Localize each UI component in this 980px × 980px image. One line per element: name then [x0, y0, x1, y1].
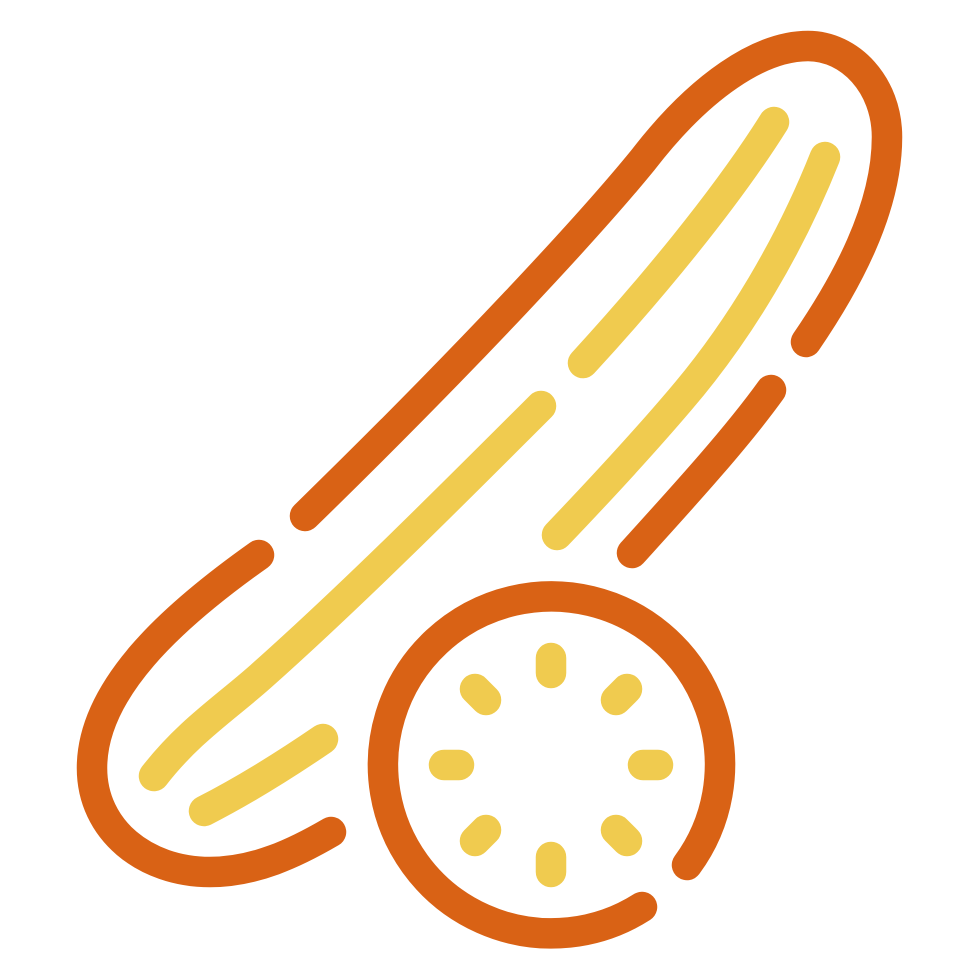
slice seeds	[444, 658, 658, 872]
slice rind	[383, 596, 720, 933]
cucumber outline	[92, 46, 887, 872]
cucumber highlights	[154, 122, 825, 811]
cucumber slice	[383, 596, 720, 933]
